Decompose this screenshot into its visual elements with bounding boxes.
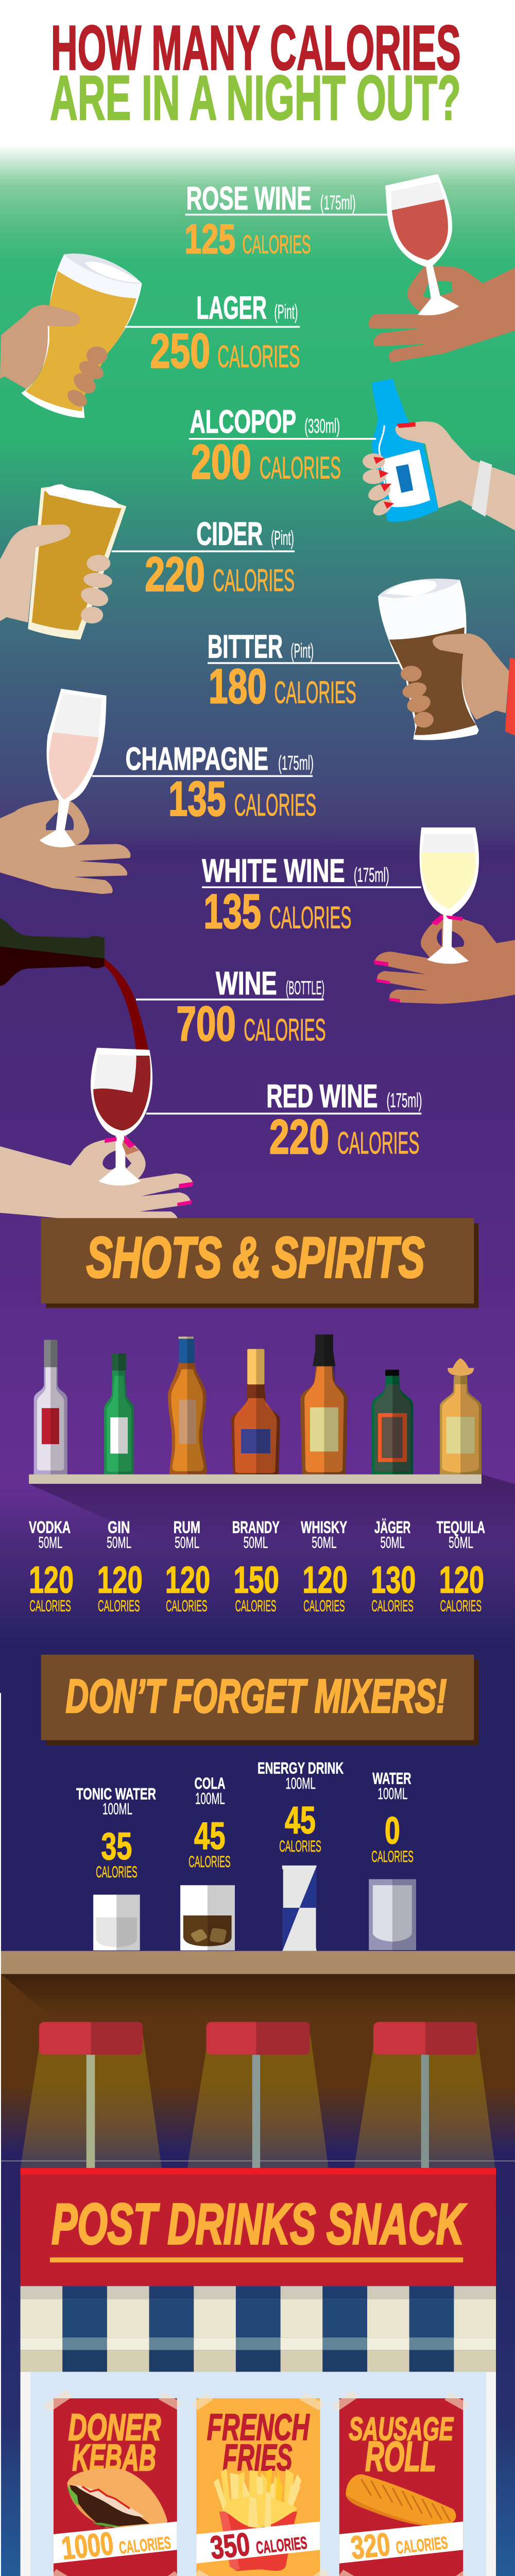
mixer: water: 0 xyxy=(385,1809,400,1852)
spirit: gin: GIN xyxy=(108,1518,130,1537)
mixer: water: WATER xyxy=(372,1769,411,1788)
mixer: water: 100ML xyxy=(377,1785,407,1803)
bitter label: (Pint) xyxy=(290,640,314,662)
spirit: whisky: WHISKY xyxy=(301,1518,347,1537)
bottle: jager xyxy=(372,1370,413,1475)
drink: red wine xyxy=(0,1048,422,1226)
mixer: tonic water: CALORIES xyxy=(96,1863,138,1881)
calories band: CALORIES xyxy=(255,2533,308,2558)
white wine label: 135 xyxy=(203,884,261,939)
calories band xyxy=(196,2521,320,2566)
mixer: cola xyxy=(180,1774,235,1951)
champagne label xyxy=(92,740,316,826)
mixer: cola: 100ML xyxy=(195,1789,225,1808)
spirit: jager: 50ML xyxy=(381,1533,405,1552)
bottle: brandy xyxy=(231,1349,280,1475)
calories band: 1000 xyxy=(59,2525,115,2566)
icon: hand holding white wine glass xyxy=(374,827,515,1004)
spirit: vodka xyxy=(29,1518,74,1615)
champagne label: CHAMPAGNE xyxy=(126,740,268,776)
spirit: brandy: BRANDY xyxy=(232,1518,280,1537)
panel: shots and spirits: CALORIES xyxy=(98,1597,140,1615)
panel: shots and spirits: CALORIES xyxy=(371,1597,414,1615)
red wine label: 220 xyxy=(269,1109,329,1164)
mixer: energy drink xyxy=(258,1759,344,1951)
white wine label xyxy=(202,853,421,939)
lager label xyxy=(125,290,300,378)
poster: french fries: FRENCH xyxy=(207,2407,310,2448)
shop sign: post drinks snack xyxy=(21,2168,496,2286)
striped awning xyxy=(21,2286,496,2372)
spirit: rum: RUM xyxy=(174,1518,200,1537)
icon: hand holding lager pint xyxy=(0,253,142,418)
alcopop label xyxy=(189,403,376,489)
shop body xyxy=(21,2372,496,2576)
rose wine label: ROSE WINE xyxy=(186,180,312,217)
icon: hand holding champagne flute xyxy=(0,689,131,894)
spirit: rum: 120 xyxy=(165,1559,210,1601)
lager label: LAGER xyxy=(196,290,267,326)
spirit: jager xyxy=(371,1518,416,1615)
bottle: whisky xyxy=(300,1334,348,1475)
text: (175ml) xyxy=(278,752,314,774)
drink: champagne xyxy=(0,689,316,894)
text: (BOTTLE) xyxy=(286,977,324,998)
bottle: gin xyxy=(104,1353,134,1475)
bitter label: BITTER xyxy=(208,629,283,665)
bottle: vodka xyxy=(34,1340,67,1475)
text: CALORIES xyxy=(244,1012,326,1047)
spirit: whisky: 50ML xyxy=(312,1533,337,1552)
mixer: cola: COLA xyxy=(195,1774,226,1792)
rose wine label xyxy=(184,180,389,262)
calories band: 350 xyxy=(208,2526,252,2566)
icon: hand holding red wine glass xyxy=(0,1048,194,1226)
wine label xyxy=(136,965,326,1051)
spirit: rum xyxy=(165,1518,210,1615)
spirit: gin: 50ML xyxy=(107,1533,131,1552)
mixer: water xyxy=(369,1769,416,1950)
spirit: tequila xyxy=(437,1518,485,1615)
spirit: tequila: 50ML xyxy=(449,1533,473,1552)
mixer: tonic water: TONIC WATER xyxy=(76,1785,156,1803)
white wine label: CALORIES xyxy=(269,900,351,935)
spirit: jager: JÄGER xyxy=(374,1518,410,1537)
poster: sausage roll xyxy=(332,2391,469,2576)
bitter label: 180 xyxy=(209,659,267,714)
icon: hand holding alcopop bottle xyxy=(361,379,515,531)
spirit: jager: 130 xyxy=(371,1559,416,1601)
title xyxy=(50,13,461,133)
drink: alcopop xyxy=(189,379,515,531)
text: (Pint) xyxy=(274,301,298,323)
drink: white wine xyxy=(202,827,515,1004)
poster: doner kebab: DONER xyxy=(68,2407,161,2448)
champagne label: 135 xyxy=(168,771,226,826)
bitter label xyxy=(208,629,399,714)
shelf shadow xyxy=(29,1475,515,1537)
text: CALORIES xyxy=(213,563,295,598)
panel: mixers xyxy=(1,1655,515,2016)
panel: shots and spirits: CALORIES xyxy=(166,1597,207,1615)
poster: french fries xyxy=(192,2393,329,2576)
red wine label: RED WINE xyxy=(266,1078,377,1114)
white wine label: (175ml) xyxy=(354,864,389,887)
calories band xyxy=(339,2521,463,2566)
poster: french fries: FRIES xyxy=(222,2437,293,2479)
icon: hand holding cider pint xyxy=(0,484,127,639)
panel: shots and spirits: CALORIES xyxy=(235,1597,276,1615)
panel: mixers: CALORIES xyxy=(371,1848,414,1866)
calories band: 320 xyxy=(349,2526,392,2566)
alcopop label: (330ml) xyxy=(304,415,340,437)
heading sign: shots and spirits xyxy=(41,1218,478,1308)
mixer: tonic water: 100ML xyxy=(102,1800,132,1818)
cider label xyxy=(112,516,295,601)
mixer: cola: 45 xyxy=(194,1815,226,1857)
mixer: energy drink: CALORIES xyxy=(279,1837,321,1855)
drink: bitter xyxy=(208,579,515,740)
drink: lager xyxy=(0,253,300,418)
calories band: CALORIES xyxy=(395,2533,449,2558)
text: (Pint) xyxy=(271,527,294,549)
bar stools xyxy=(1,2022,515,2168)
alcopop label: 200 xyxy=(191,434,251,489)
red wine label xyxy=(146,1078,422,1164)
panel: shots and spirits: CALORIES xyxy=(303,1597,345,1615)
shelf xyxy=(29,1475,482,1484)
heading sign: don't forget mixers xyxy=(41,1655,478,1745)
icon: french fries xyxy=(214,2468,301,2571)
icon: wine bottle pouring xyxy=(0,919,149,1056)
text: (175ml) xyxy=(387,1090,422,1112)
bottle: tequila xyxy=(440,1358,482,1475)
wine label: WINE xyxy=(216,965,277,1002)
spirit: vodka: 120 xyxy=(29,1559,74,1601)
icon: sausage roll xyxy=(346,2475,456,2527)
white wine label: WHITE WINE xyxy=(202,853,345,889)
alcopop label: ALCOPOP xyxy=(190,403,296,440)
spirit: whisky: 120 xyxy=(302,1559,348,1601)
spirit: brandy xyxy=(232,1518,280,1615)
wine label: 700 xyxy=(176,996,236,1051)
spirit: vodka: 50ML xyxy=(39,1533,62,1552)
poster: doner kebab: KEBAB xyxy=(72,2437,156,2479)
lager label: 250 xyxy=(150,324,210,378)
bar counter xyxy=(1,1951,515,2016)
poster: doner kebab xyxy=(43,2390,182,2576)
spirit: brandy: 150 xyxy=(233,1559,279,1601)
drink: cider xyxy=(0,484,295,639)
panel: post drinks snack shop xyxy=(21,2168,496,2576)
calories band xyxy=(54,2521,177,2566)
icon: hand holding rose wine glass xyxy=(369,174,515,362)
mixer: energy drink: 100ML xyxy=(285,1774,316,1792)
drink: rose wine xyxy=(184,174,515,362)
rose wine label: (175ml) xyxy=(320,192,356,214)
spirit: brandy: 50ML xyxy=(244,1533,268,1552)
icon: hand holding bitter pint xyxy=(378,579,515,740)
icon: doner kebab xyxy=(67,2468,167,2530)
cider label: CIDER xyxy=(196,516,263,552)
spirit: whisky xyxy=(301,1518,348,1615)
rose wine label: CALORIES xyxy=(243,230,311,259)
spirit: gin: 120 xyxy=(97,1559,143,1601)
panel: shots and spirits xyxy=(29,1218,515,1615)
drink: wine bottle xyxy=(0,919,326,1056)
spirit: gin xyxy=(97,1518,143,1615)
mixer: tonic water: 35 xyxy=(101,1825,132,1868)
alcopop label: CALORIES xyxy=(260,450,341,485)
mixer: tonic water xyxy=(76,1785,156,1951)
spirit: vodka: VODKA xyxy=(29,1518,71,1537)
mixer: energy drink: 45 xyxy=(285,1799,316,1842)
spirit: rum: 50ML xyxy=(175,1533,199,1552)
bottle: rum xyxy=(168,1336,207,1475)
bitter label: CALORIES xyxy=(274,675,356,710)
text: CALORIES xyxy=(217,339,300,374)
panel: mixers: CALORIES xyxy=(188,1853,231,1871)
calories band: CALORIES xyxy=(118,2533,172,2558)
text: CALORIES xyxy=(234,787,316,822)
panel: shots and spirits: CALORIES xyxy=(29,1597,71,1615)
poster: sausage roll: ROLL xyxy=(365,2433,436,2480)
rose wine label: 125 xyxy=(184,216,235,262)
cider label: 220 xyxy=(145,547,205,601)
mixer: energy drink: ENERGY DRINK xyxy=(258,1759,344,1777)
